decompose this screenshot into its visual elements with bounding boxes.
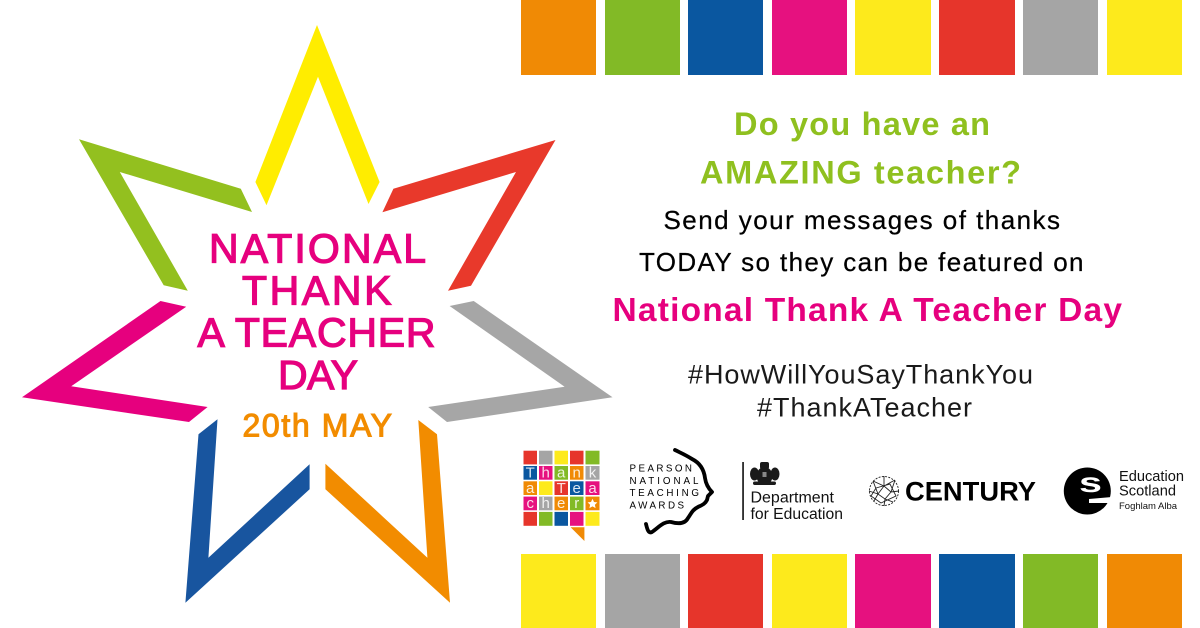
logo: pearson national teaching awards: NATIONAL	[630, 476, 699, 487]
logo: education scotland: Education	[1119, 469, 1184, 485]
logo: century: CENTURY	[905, 477, 1036, 507]
logo: education scotland: Foghlam Alba	[1119, 501, 1178, 512]
logo: thank a teacher: e	[573, 480, 581, 497]
heading: amazing teacher question	[700, 106, 1021, 190]
logo: thank a teacher: a	[557, 464, 566, 482]
star title: A TEACHER	[198, 310, 436, 356]
logo: pearson national teaching awards: AWARDS	[630, 501, 684, 512]
star point: green	[79, 139, 252, 291]
logo: thank a teacher	[524, 451, 600, 541]
body text: send messages	[639, 205, 1084, 277]
logo: education scotland: Scotland	[1119, 484, 1176, 500]
logo: thank a teacher: r	[574, 495, 579, 512]
logo: department for education: for Education	[750, 506, 843, 523]
logo: pearson national teaching awards	[630, 450, 712, 532]
logo: thank a teacher: a	[526, 480, 535, 497]
star title	[198, 226, 436, 398]
body text: send messages: Send your messages of thanks	[664, 205, 1060, 235]
logo: thank a teacher: h	[542, 464, 550, 482]
heading: amazing teacher question: AMAZING teacher?	[700, 154, 1021, 190]
heading: amazing teacher question: Do you have an	[734, 106, 990, 142]
body text: send messages: TODAY so they can be featured on	[639, 247, 1084, 277]
star point: blue	[185, 419, 310, 603]
star title: THANK	[242, 268, 392, 314]
logo: department for education: Department	[750, 490, 835, 507]
top colour squares	[521, 0, 1182, 75]
star point: yellow	[255, 25, 380, 205]
logo: thank a teacher: T	[526, 464, 535, 482]
logo: thank a teacher: h	[542, 495, 550, 512]
star point: magenta	[22, 301, 208, 422]
star point: grey	[428, 301, 612, 422]
logo: thank a teacher: k	[589, 464, 597, 482]
star point: red	[382, 140, 556, 291]
logo: pearson national teaching awards: TEACHING	[630, 488, 699, 499]
hashtags	[688, 360, 1033, 423]
star point: orange	[325, 420, 450, 603]
icon: network globe	[869, 476, 899, 506]
logo: thank a teacher: n	[573, 464, 581, 482]
hashtags: #ThankATeacher	[757, 393, 972, 423]
logo: thank a teacher: a	[588, 480, 597, 497]
heading: national thank a teacher day: National Thank A Teacher Day	[612, 292, 1122, 329]
star title: DAY	[278, 352, 358, 398]
logo: pearson national teaching awards: PEARSON	[630, 464, 692, 475]
logo: education scotland	[1064, 467, 1184, 514]
seven-colour star outline	[22, 25, 612, 603]
icon: ribbon profile of a face	[646, 450, 712, 532]
logo: thank a teacher: c	[526, 495, 534, 512]
logo: thank a teacher: e	[557, 495, 565, 512]
logo: thank a teacher: T	[557, 480, 566, 497]
hashtags: #HowWillYouSayThankYou	[688, 360, 1033, 390]
icon: e with s: s	[1079, 467, 1102, 498]
star title: NATIONAL	[209, 226, 426, 272]
icon: royal crest	[750, 462, 780, 485]
logo: department for education	[742, 462, 843, 523]
bottom colour squares	[521, 554, 1182, 628]
star date: 20th MAY	[242, 408, 392, 444]
